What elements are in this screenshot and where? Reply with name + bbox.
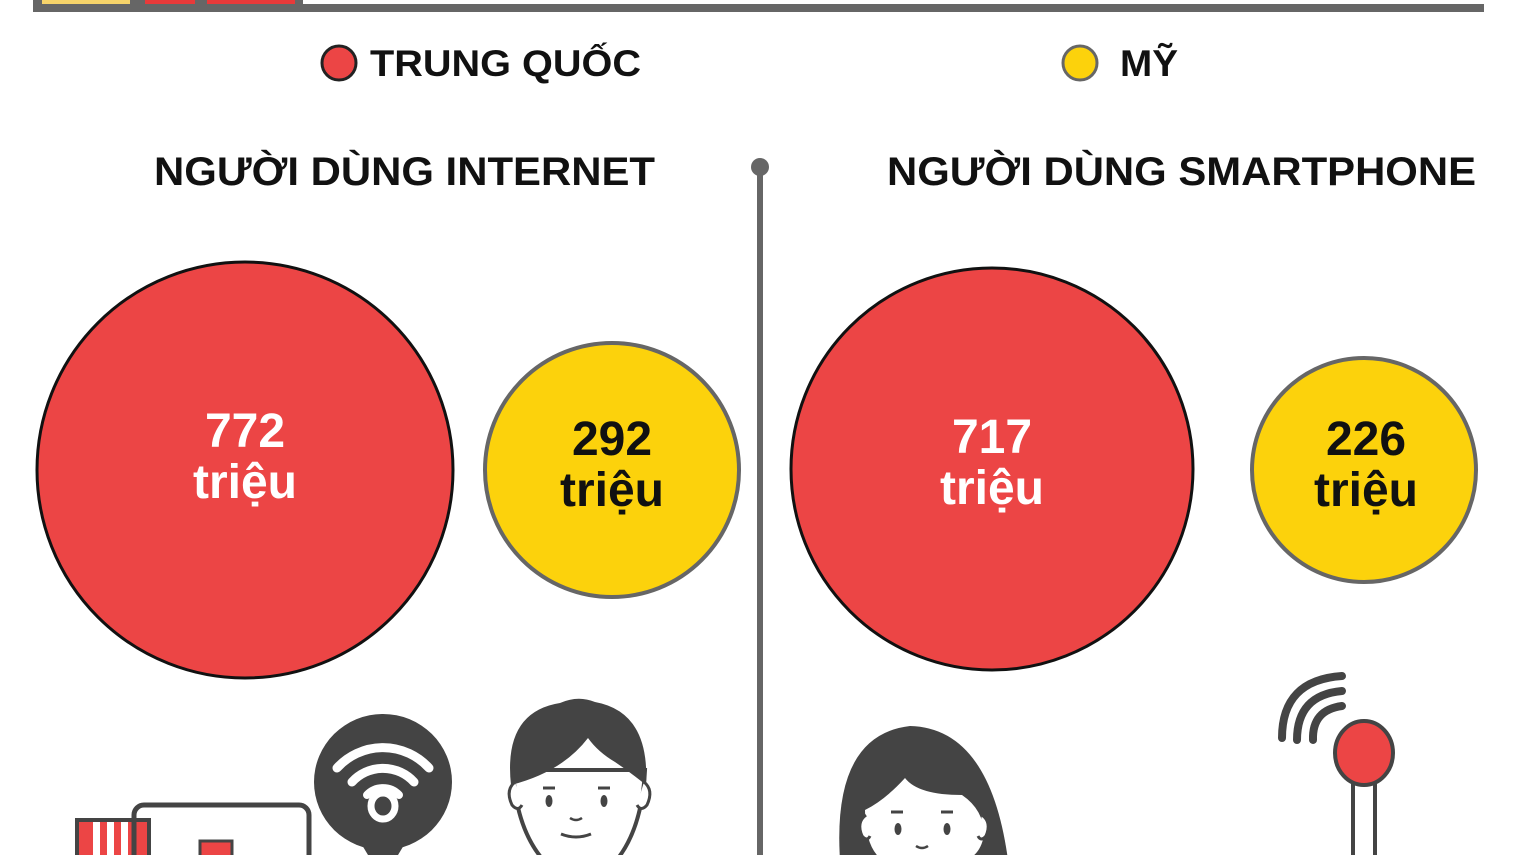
heading: smartphone users: NGƯỜI DÙNG SMARTPHONE [887,148,1476,194]
heading: internet users: NGƯỜI DÙNG INTERNET [154,148,655,194]
icon: router / laptop [77,805,309,855]
circle: US internet 292 [485,343,739,597]
top bar [33,0,1484,12]
legend: Trung Quoc: TRUNG QUỐC [370,42,641,84]
legend: My: MỸ [1120,42,1178,84]
icon: wifi balloon [314,714,452,855]
circle: China internet 772 [37,262,453,678]
circle: US internet 292: 292 [572,413,652,466]
circle: China internet 772: triệu [193,456,297,509]
circle: US internet 292: triệu [560,464,664,517]
circle: US smartphone 226 [1252,358,1476,582]
icon: antenna signal [1282,676,1393,855]
icon: woman face [839,726,1008,855]
circle: China smartphone 717: 717 [952,411,1032,464]
circle: US smartphone 226: 226 [1326,413,1406,466]
legend: My [1063,42,1178,84]
icon: boy face [509,699,650,855]
circle: China smartphone 717: triệu [940,462,1044,515]
divider [751,158,769,855]
circle: China smartphone 717 [791,268,1193,670]
circle: China internet 772: 772 [205,405,285,458]
circle: US smartphone 226: triệu [1314,464,1418,517]
